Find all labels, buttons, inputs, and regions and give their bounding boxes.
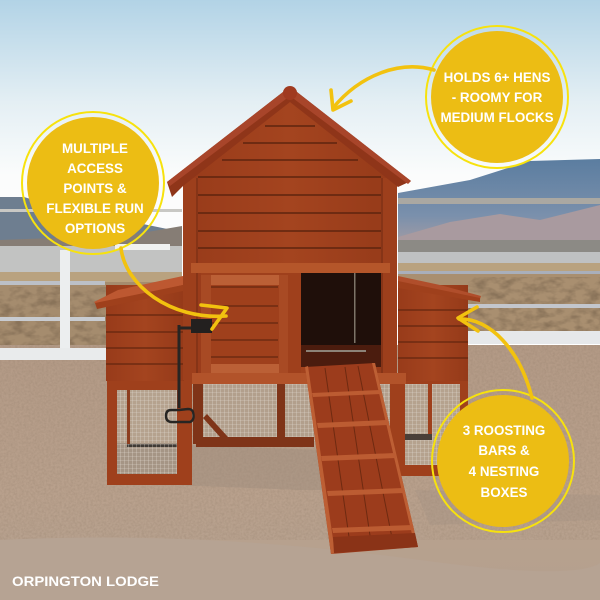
left nest box: [94, 276, 184, 381]
dark doorway: [301, 273, 381, 367]
right nest box: [398, 276, 481, 381]
callout: multiple access points: ACCESS: [67, 161, 123, 176]
floor rail: [192, 373, 406, 384]
callout: multiple access points: POINTS &: [63, 181, 127, 196]
callout: multiple access points: OPTIONS: [65, 221, 125, 236]
chicken coop: [94, 86, 481, 554]
main house body: [183, 98, 397, 380]
arrow: to top of coop: [331, 67, 434, 110]
callout: roosting bars and nesting boxes: 3 ROOSTING: [463, 423, 545, 438]
main roof: [167, 86, 411, 197]
callout: holds 6+ hens: [426, 26, 568, 168]
callout: roosting bars and nesting boxes: 4 NESTING: [469, 464, 539, 479]
right wire run: [390, 375, 468, 476]
arrow: to nesting box: [458, 307, 532, 398]
product name: ORPINGTON LODGE: [12, 573, 159, 589]
callout: roosting bars and nesting boxes: BARS &: [478, 443, 530, 458]
arrow: to access door: [121, 248, 227, 329]
callout: multiple access points: [22, 112, 164, 254]
callout: holds 6+ hens: - ROOMY FOR: [452, 90, 543, 105]
white paddock fence: [0, 198, 600, 360]
ramp: [305, 363, 418, 554]
centre run frame: [193, 384, 393, 447]
lower door panel: [201, 273, 301, 373]
callout: multiple access points: MULTIPLE: [62, 141, 128, 156]
callout: holds 6+ hens: MEDIUM FLOCKS: [440, 110, 554, 125]
callout: roosting bars and nesting boxes: BOXES: [481, 485, 528, 500]
callout: holds 6+ hens: HOLDS 6+ HENS: [444, 70, 550, 85]
callout: multiple access points: FLEXIBLE RUN: [46, 201, 144, 216]
callout: roosting bars and nesting boxes: [432, 390, 574, 532]
left wire run: [107, 365, 192, 485]
house crossbar: [191, 263, 390, 273]
door latch and handle: [166, 319, 212, 422]
